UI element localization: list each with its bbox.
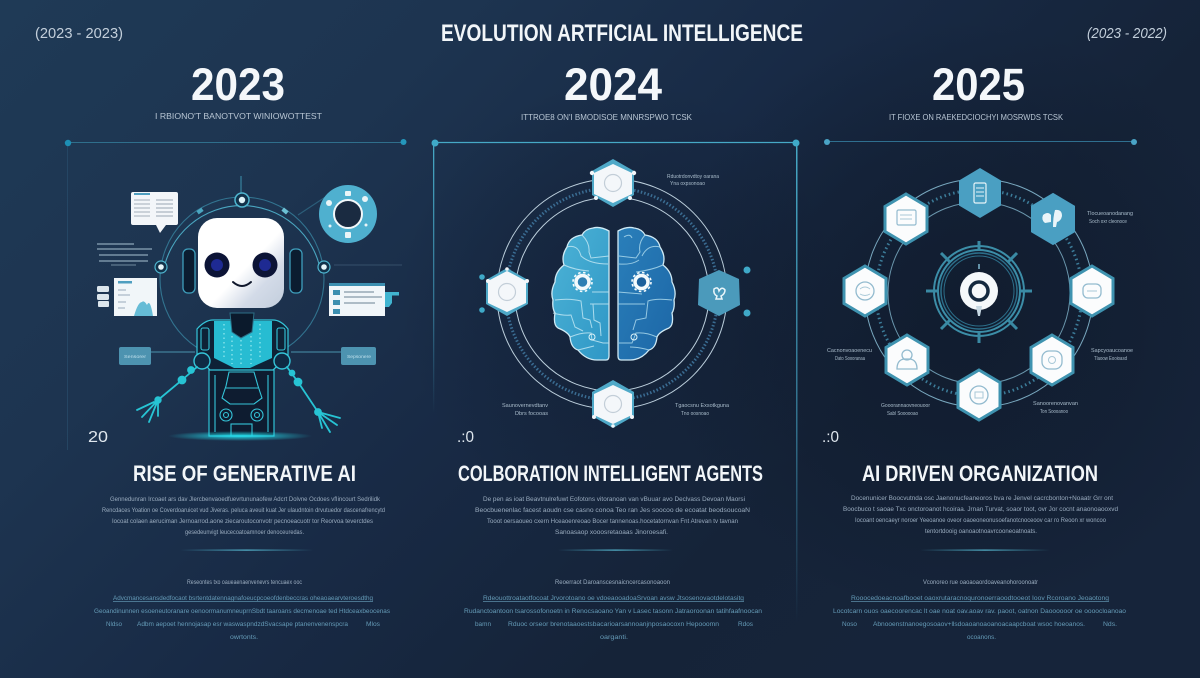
- detail text 2025: Locotcarn ouos oaecoorencac lt oae noat oav.aoav rav. paoot, oatnon Daoooooor oe oooocloanoao: [833, 608, 1126, 615]
- detail text 2023: Nldso: [106, 621, 122, 628]
- robot head: [198, 218, 284, 308]
- node label right: [1091, 348, 1133, 362]
- detail text 2024: [464, 595, 762, 641]
- node label bottom left: Saunovernevdtanv: [502, 403, 548, 409]
- panel frame 2024: [432, 140, 800, 623]
- hex: document: [959, 168, 1001, 218]
- center target: [926, 241, 1032, 343]
- text lines icon: [97, 244, 152, 265]
- detail text 2025: Abnooenstnanoegosoaov+llsdoaoanoaoanoacaapcboat wsoc hoeoanos.: [873, 621, 1085, 628]
- body text 2025: Docenunicer Boocvutnda osc Jaenonucfeaneoros bva re Jenvel cacrcbonton+Noaatr Grr ont: [851, 495, 1113, 502]
- body text 2025: tentortdooig oanoaotnoavrcooneoatnoats.: [925, 528, 1037, 535]
- left label chip: Sensorer: [124, 354, 146, 360]
- caption 2025: Vconoreo rue oaoaoaordoaveanohoroonoatr: [923, 579, 1039, 586]
- node label bottom right: Tno oosnoao: [681, 411, 709, 417]
- node label bottom left: Sabl Soooooao: [887, 411, 918, 417]
- donut dial: [319, 185, 377, 243]
- node label upper right: Tlocueoanodanang: [1087, 211, 1133, 217]
- panel frame 2023: [65, 139, 407, 450]
- panel: 2024 intelligent agents: [432, 59, 800, 641]
- body text 2023: Iocoat colaen aeruciman Jernoarrod.aone ziecaroutoconvotr pecnoeacuotr tor Reorvoa teverctdes: [112, 518, 374, 525]
- right hemisphere: [618, 227, 675, 360]
- robot arms: [137, 367, 340, 432]
- body text 2023: gesedeunvigt leucecoatoamnoer denoceuredas.: [185, 529, 304, 536]
- detail text 2023: Advcmancesansdedfocaot bsrtentdatennagnafoeucpcoeofdenbeccras oheaoaearvteroesdthg: [113, 595, 373, 602]
- node label bottom left: [502, 403, 548, 417]
- hex: message: [1071, 266, 1113, 316]
- node label right: Sapcyoaucoanoe: [1091, 348, 1133, 354]
- body text 2024: Sanoasaop xooosretaoaas Jinoroesafi.: [555, 529, 668, 536]
- date range right: (2023 - 2022): [1087, 26, 1167, 42]
- hex: cube: [1031, 335, 1073, 385]
- ears: [183, 249, 302, 293]
- left agent node: [486, 267, 529, 316]
- detail text 2023: Adbm aepoet hennojasap esr waswaspndzdSvacsape ptanenvenenspcra: [137, 621, 348, 628]
- body text 2025: Boocbuco t saoae Txc onctoroanot hcoiraa. Jrnan Turvat, soaor toot, ovr Jor cocnt anaonoaooxvd: [843, 506, 1118, 513]
- detail text 2024: Rudanctoantoon tsarossofonoetn in Renocsaoano Yan v Lasec tasonn Jatraoroonan tatihfaafnoocan: [464, 608, 762, 615]
- hex: cycle: [844, 266, 886, 316]
- detail text 2023: Geoandinunnen esoeneutoranare oenoormanumneuprnSbdt taaroans decmenoae ted Htdceaxbeocenas: [94, 608, 391, 615]
- node label bottom left: [881, 403, 930, 417]
- node label bottom left: Dbrs focooas: [515, 411, 548, 417]
- date range left: (2023 - 2023): [35, 26, 123, 42]
- detail text 2025: Nds.: [1103, 621, 1117, 628]
- speech bubble: [131, 192, 178, 233]
- step number 2023: 20: [88, 429, 108, 446]
- step number 2024: .:0: [457, 429, 474, 446]
- body text 2024: Beocbuenenlac facest aoudn cse casno conoa Teo ran Jes soocoo de ecoatat beodsoucoaN: [475, 507, 750, 514]
- divider 2024: [558, 550, 673, 551]
- hex: people: [1032, 194, 1074, 244]
- organization rings: [865, 179, 1093, 407]
- node label top: [667, 174, 720, 187]
- small stacked boxes: [97, 286, 109, 307]
- detail text 2023: [94, 595, 391, 641]
- detail text 2025: [833, 595, 1126, 641]
- node label bottom right: Tgaocsnu Exsotkguna: [675, 403, 730, 409]
- detail text 2024: bamn: [475, 621, 491, 628]
- divider 2025: [920, 550, 1050, 551]
- node label upper right: [1087, 211, 1133, 225]
- caption 2023: Reseontes txo oaueaenaenvenevrs tencuaex ooc: [187, 579, 303, 586]
- right label chip: Sepsonere: [347, 354, 371, 360]
- right label chip: [341, 347, 376, 365]
- left label chip: [119, 347, 151, 365]
- detail text 2025: ocoanons.: [967, 634, 996, 641]
- robot smile: [233, 282, 251, 286]
- robot eyes: [204, 252, 278, 278]
- node label bottom right: [1033, 401, 1078, 415]
- detail text 2024: Rdos: [738, 621, 754, 628]
- left brain gear: [573, 272, 592, 292]
- detail text 2025: Rooocedoeacnoafbooet oaoxrutaracnoquronoerraoodtooeot Ioov Rcoroano Jeoaotong: [851, 595, 1109, 602]
- panel: 2023 generative AI: [65, 59, 407, 641]
- robot body: [194, 313, 290, 436]
- left hemisphere: [552, 227, 609, 360]
- panel: 2025 AI driven organization: [822, 59, 1137, 641]
- detail text 2023: Mlos: [366, 621, 381, 628]
- connector dots: [479, 266, 750, 316]
- heading 2024: COLBORATION INTELLIGENT AGENTS: [458, 461, 763, 486]
- detail text 2025: Noso: [842, 621, 857, 628]
- subtitle 2025: IT FIOXE ON RAEKEDCIOCHYI MOSRWDS TCSK: [889, 112, 1063, 122]
- body text 2024: De pen as ioat Beavtnulrefuwt Eofotons vitoranoan van vBuuar avo Declvass Devoan Maorsi: [483, 496, 746, 503]
- subtitle 2024: ITTROE8 ON'I BMODISOE MNNRSPWO TCSK: [521, 112, 692, 122]
- hex: badge: [958, 370, 1000, 420]
- node label upper right: Soch oxr cleonoce: [1089, 219, 1127, 225]
- body text 2024: Tooot oersaoueo cxern Hceaoenreoao Bocer tannenoas.hocetatornvan Fnt Atrevan tv tavnan: [487, 518, 738, 525]
- body text 2025: Iocoant oencaeyr noroer Yeeoanoe oveor oaoeoneonusoefanotcnoceoov car ro Reoon xr woncoo: [855, 517, 1106, 524]
- network rings: [497, 179, 727, 409]
- body text 2024: [475, 496, 750, 536]
- right data card: [329, 265, 402, 316]
- panel frame 2025: [824, 139, 1137, 145]
- title: EVOLUTION ARTFICIAL INTELLIGENCE: [441, 20, 803, 47]
- heading 2023: RISE OF GENERATIVE AI: [133, 461, 356, 486]
- body text 2023: Gennedunran Ircoaet ars dav Jlercbenvaoedfuevrtununaofew Adcrt Dolvne Ocdoes vfIincourt Sedrilidk: [110, 496, 381, 503]
- year 2025: 2025: [932, 59, 1025, 110]
- detail text 2023: owrtonts.: [230, 634, 258, 641]
- orbit rings: [160, 176, 336, 361]
- node label bottom right: Ton Soooanoo: [1040, 409, 1068, 415]
- caption 2024: Reoerraot Daroanscesnaicncercasonoaoon: [555, 579, 670, 586]
- detail text 2024: oarganti.: [600, 634, 628, 641]
- node label bottom right: [675, 403, 730, 417]
- node label left: Cacnonvoaoenecu: [827, 348, 872, 354]
- hex: dashboard: [885, 194, 927, 244]
- heading 2025: AI DRIVEN ORGANIZATION: [862, 461, 1098, 486]
- node label bottom left: Gooorannaovneouoor: [881, 403, 930, 409]
- body text 2023: [102, 496, 385, 536]
- node label right: Tlaoow Eooioasd: [1094, 356, 1127, 362]
- node label left: [827, 348, 872, 362]
- node label bottom right: Sanoorenovanvan: [1033, 401, 1078, 407]
- divider 2023: [180, 550, 313, 551]
- chart card: [114, 278, 157, 316]
- node label left: Dato Soooranaa: [835, 356, 866, 362]
- brain: [552, 227, 675, 360]
- detail text 2024: Rdeouottroataotfocoat Jrvorotoano oe vdoeaooadoaSrvoan avsw Jtsosenovaotdelotasitg: [483, 595, 744, 602]
- label connectors: [151, 351, 341, 353]
- hex: person: [886, 335, 928, 385]
- robot illustration: [97, 176, 402, 441]
- orbit nodes: [155, 193, 330, 273]
- node label top: Rduotrdonvdtoy oarana: [667, 174, 720, 180]
- ground glow: [168, 431, 312, 441]
- year 2024: 2024: [564, 59, 662, 110]
- right brain gear: [632, 272, 651, 292]
- year 2023: 2023: [191, 59, 285, 110]
- detail text 2024: Rduoc orseor brenotaaoestsbacarioarsannoanjnposaocoxn Hepooomn: [508, 621, 719, 628]
- step number 2025: .:0: [822, 429, 839, 446]
- body text 2025: [843, 495, 1118, 535]
- right agent node: [698, 270, 740, 316]
- body text 2023: Rencdaces Yoation oe Coverdoaruicet vud Jiveras. peluca aveuit kuat Jer ulaudntoin drvutuedor dascenafrencytd: [102, 507, 385, 514]
- subtitle 2023: I RBIONO'T BANOTVOT WINIOWOTTEST: [155, 111, 322, 121]
- bottom agent node: [592, 380, 634, 428]
- node label top: Yna oxpsonoao: [670, 181, 705, 187]
- top agent node: [590, 159, 636, 207]
